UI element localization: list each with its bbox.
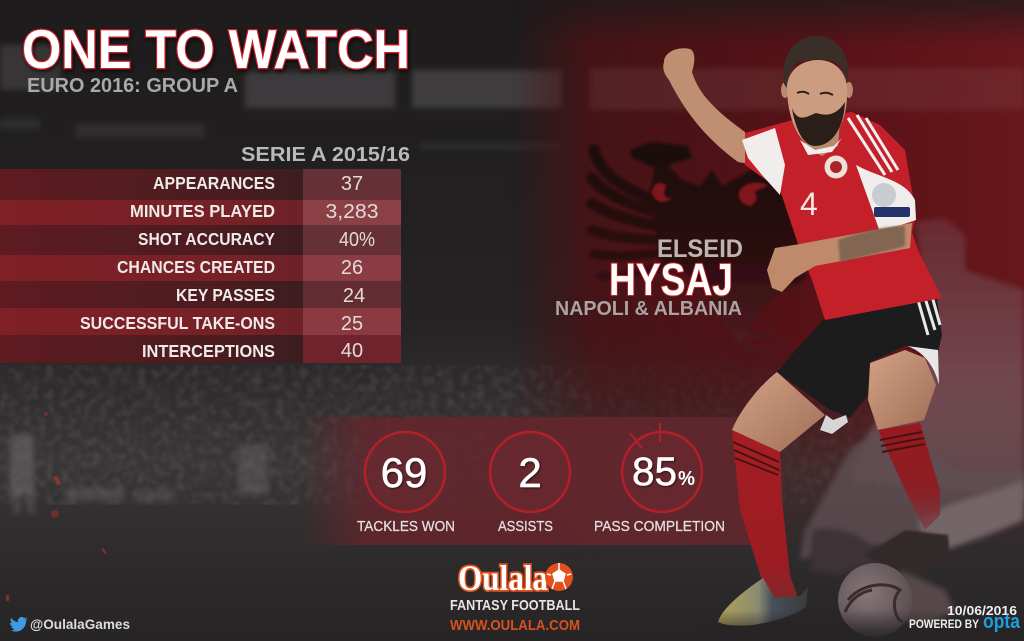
- face: [787, 60, 847, 146]
- row: chances created: CHANCES CREATED: [117, 257, 275, 277]
- stat: pass completion: [594, 423, 725, 535]
- row: minutes played: MINUTES PLAYED: [130, 201, 275, 221]
- row: chances created: 26: [341, 257, 363, 279]
- website: WWW.OULALA.COM: [450, 617, 580, 634]
- left leg: [732, 372, 825, 452]
- jersey: [742, 112, 942, 320]
- row: shot accuracy: [138, 229, 375, 251]
- beard: [792, 102, 845, 146]
- title: ONE TO WATCH: [22, 18, 410, 80]
- bottom shade over figures: [700, 610, 1024, 641]
- stat: pass completion: 85: [632, 450, 677, 494]
- row: successful take-ons: 25: [341, 313, 363, 335]
- right leg: [868, 350, 936, 430]
- table heading: SERIE A 2015/16: [241, 144, 410, 166]
- football: [838, 563, 912, 637]
- background: red flag zone: [527, 0, 1024, 504]
- logo: opta: opta: [983, 611, 1021, 633]
- club and country: NAPOLI & ALBANIA: [555, 297, 742, 320]
- shorts: [777, 292, 942, 434]
- row: appearances: APPEARANCES: [153, 173, 275, 193]
- row: appearances: 37: [341, 173, 363, 195]
- stat: tackles won: [357, 432, 455, 535]
- forearm: [767, 223, 912, 292]
- tattoo: [838, 226, 905, 262]
- row: minutes played: 3,283: [326, 201, 378, 223]
- jersey: badge: [872, 183, 896, 207]
- logo: Oulala: Oulala: [458, 558, 548, 598]
- jersey: stripes: [848, 115, 898, 175]
- first name: ELSEID: [657, 235, 743, 263]
- stat: tackles won: 69: [381, 449, 427, 496]
- table: Serie A stats: [0, 144, 410, 363]
- jersey: crest: [825, 156, 847, 178]
- eyes and mouth: [797, 92, 833, 118]
- row: interceptions: 40: [341, 340, 363, 362]
- right sock: [878, 423, 940, 530]
- date and data credit: POWERED BY: [909, 617, 979, 631]
- collar: [800, 138, 842, 155]
- eagle emblem: [592, 142, 810, 372]
- stat: pass completion: %: [678, 468, 695, 490]
- raised arm: [663, 48, 755, 165]
- row: minutes played: [130, 201, 378, 223]
- stat panel backdrop: [300, 417, 760, 545]
- row: shot accuracy: SHOT ACCURACY: [138, 229, 275, 249]
- stat: pass completion: PASS COMPLETION: [594, 519, 725, 535]
- boot: [718, 578, 808, 626]
- row: shot accuracy: 40%: [339, 229, 375, 251]
- row: key passes: 24: [343, 285, 365, 307]
- logo tagline: FANTASY FOOTBALL: [450, 597, 580, 614]
- jersey: respect patch: [874, 207, 910, 217]
- subtitle: EURO 2016: GROUP A: [27, 75, 238, 97]
- surname: HYSAJ: [609, 254, 733, 305]
- row: key passes: KEY PASSES: [176, 285, 275, 305]
- neck: [802, 122, 840, 156]
- icon: twitter bird: [10, 617, 28, 632]
- stat: assists: 2: [518, 449, 542, 496]
- jersey: white sleeve left: [742, 128, 785, 195]
- date and data credit: [909, 603, 1021, 633]
- row: interceptions: INTERCEPTIONS: [142, 341, 275, 361]
- player: Elseid Hysaj: [663, 36, 942, 626]
- jersey: number 4: 4: [800, 186, 818, 222]
- ghost opponent figure: [800, 218, 1024, 625]
- stat: assists: [490, 432, 570, 535]
- player name block: [555, 235, 743, 320]
- row: successful take-ons: SUCCESSFUL TAKE-ONS: [80, 313, 275, 333]
- ears: [781, 82, 789, 98]
- twitter handle: @OulalaGames: [30, 616, 130, 632]
- head: [781, 36, 853, 156]
- jersey: white sleeve right: [856, 165, 916, 232]
- row: chances created: [117, 257, 363, 279]
- row: interceptions: [142, 340, 363, 362]
- row: successful take-ons: [80, 313, 363, 335]
- row: appearances: [153, 173, 363, 195]
- stat: assists: ASSISTS: [498, 519, 553, 535]
- left sock: [732, 430, 798, 598]
- table row bands: [0, 169, 401, 363]
- stat: tackles won: TACKLES WON: [357, 519, 455, 535]
- hair: [783, 36, 848, 88]
- row: key passes: [176, 285, 365, 307]
- date and data credit: 10/06/2016: [947, 603, 1017, 618]
